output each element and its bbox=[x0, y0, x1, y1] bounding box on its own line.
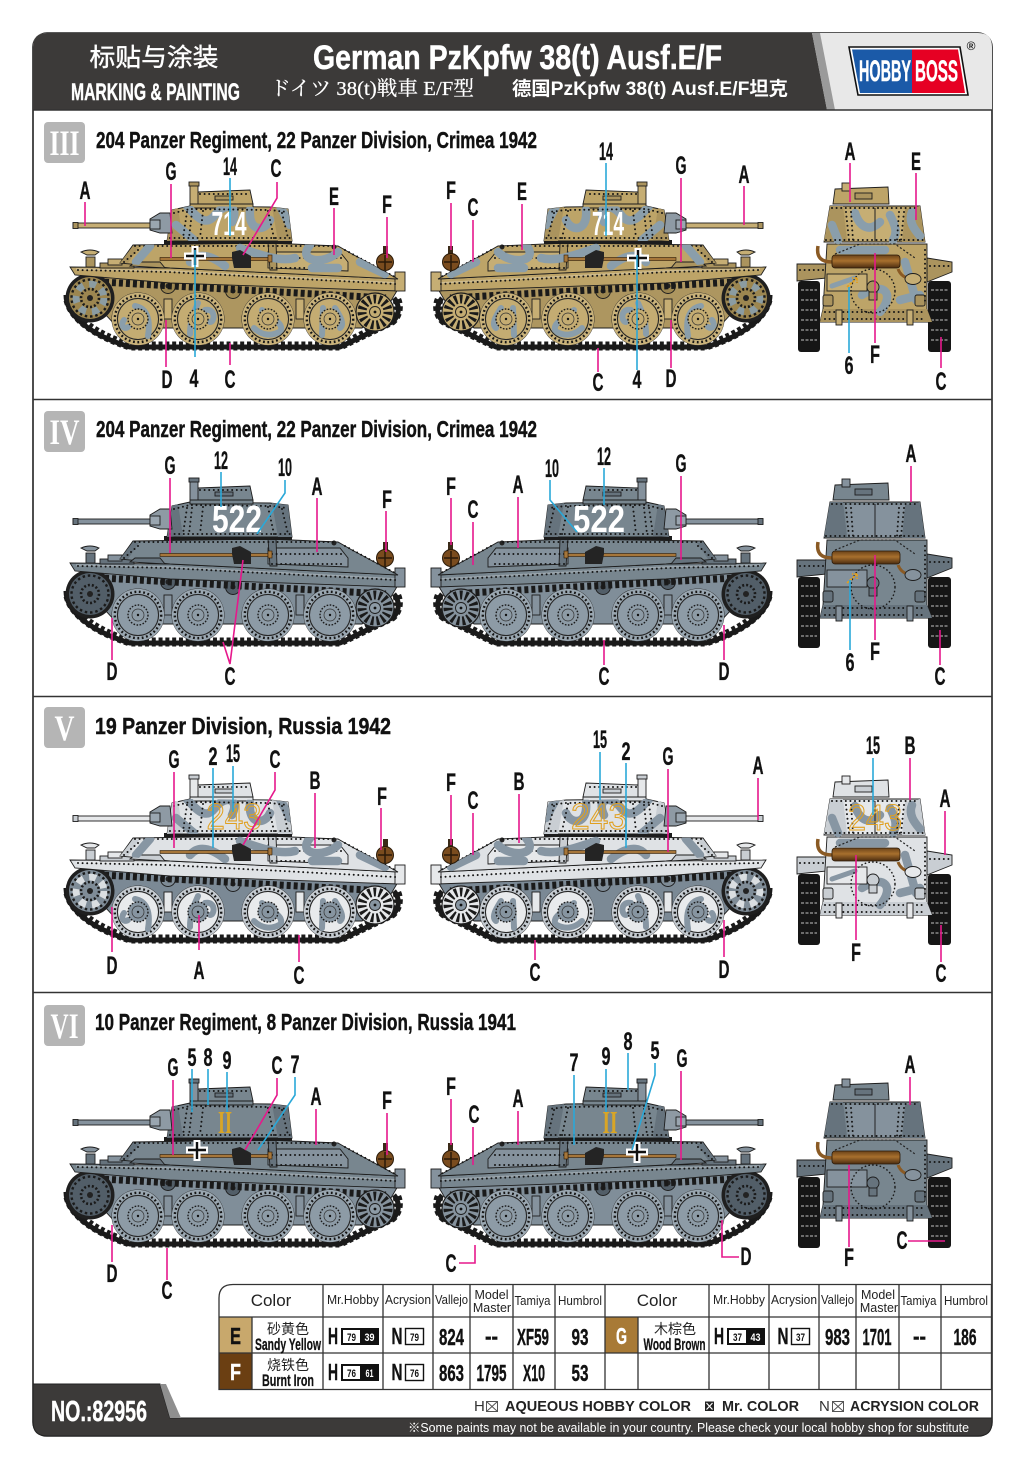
callout B: B bbox=[310, 767, 320, 795]
callout C bbox=[896, 1227, 945, 1255]
callout 12: 12 bbox=[597, 443, 611, 471]
Japanese title: ドイツ 38(t)戦車 E/F型 bbox=[270, 77, 474, 100]
callout G: G bbox=[164, 452, 176, 480]
logo: Hobby Boss: HOBBY bbox=[859, 55, 911, 88]
callout A bbox=[194, 915, 204, 985]
callout A: A bbox=[80, 177, 90, 205]
callout A bbox=[310, 1083, 322, 1145]
row: Sandy Yellow: 824 bbox=[439, 1324, 464, 1350]
row: Wood Brown: 1701 bbox=[862, 1324, 892, 1350]
callout 6 bbox=[846, 580, 854, 677]
badge: III: III bbox=[50, 123, 80, 163]
callout 4: 4 bbox=[190, 365, 199, 393]
logo: Hobby Boss: ® bbox=[967, 39, 976, 53]
callout 15 bbox=[866, 732, 880, 815]
callout G bbox=[676, 450, 686, 560]
callout 12: 12 bbox=[214, 447, 228, 475]
row: Sandy Yellow: 39 bbox=[364, 1332, 374, 1344]
badge: IV: IV bbox=[50, 412, 80, 452]
turret number: 522 bbox=[212, 499, 262, 541]
callout C: C bbox=[530, 959, 540, 987]
callout 5 bbox=[188, 1044, 197, 1112]
callout 6: 6 bbox=[844, 352, 854, 380]
callout C bbox=[162, 1248, 172, 1305]
callout G bbox=[676, 152, 686, 262]
swatch F bbox=[219, 1353, 252, 1389]
tank right side view bbox=[431, 1079, 770, 1244]
callout A: A bbox=[512, 1085, 524, 1113]
paint code legend: AQUEOUS HOBBY COLOR bbox=[505, 1398, 691, 1415]
callout G: G bbox=[676, 450, 686, 478]
callout 10: 10 bbox=[545, 455, 559, 483]
callout C: C bbox=[598, 663, 610, 691]
row: Sandy Yellow bbox=[255, 1319, 588, 1354]
row: Burnt Iron: X10 bbox=[523, 1360, 545, 1386]
tank right side view bbox=[431, 775, 770, 940]
callout C bbox=[468, 194, 478, 262]
callout 7 bbox=[258, 1051, 300, 1150]
heading: panel IV: 204 Panzer Regiment, 22 Panzer Division, Crimea 1942 bbox=[96, 416, 537, 442]
swatch E bbox=[219, 1317, 252, 1353]
table headers left: Mr.Hobby bbox=[327, 1293, 380, 1307]
header band bbox=[33, 33, 992, 110]
swatch E: E bbox=[230, 1323, 241, 1349]
heading: panel VI: 10 Panzer Regiment, 8 Panzer Division, Russia 1941 bbox=[95, 1009, 516, 1035]
tank left side view bbox=[66, 1079, 405, 1244]
callout 10 bbox=[257, 454, 292, 534]
callout A: A bbox=[844, 138, 856, 166]
turret number: 243 bbox=[848, 797, 902, 838]
badge: V: V bbox=[54, 708, 74, 748]
row: Sandy Yellow: H bbox=[328, 1323, 338, 1349]
callout G: G bbox=[676, 1045, 688, 1073]
callout F bbox=[851, 855, 861, 967]
callout 12 bbox=[597, 443, 611, 505]
callout 14 bbox=[223, 153, 237, 236]
callout G: G bbox=[676, 152, 686, 180]
callout F bbox=[446, 177, 456, 250]
callout B: B bbox=[514, 768, 524, 796]
callout 6 bbox=[844, 287, 854, 380]
callout 7: 7 bbox=[570, 1049, 578, 1077]
cross marking bbox=[184, 246, 206, 267]
callout D: D bbox=[718, 956, 730, 984]
callout C bbox=[468, 496, 478, 565]
callout F bbox=[446, 1073, 456, 1145]
row: Burnt Iron: 1795 bbox=[476, 1360, 507, 1386]
callout F: F bbox=[382, 1087, 392, 1115]
callout C bbox=[223, 560, 243, 691]
row: Wood Brown: 186 bbox=[954, 1324, 976, 1350]
callout G: G bbox=[662, 743, 674, 771]
badge: V bbox=[44, 707, 85, 748]
turret number: 714 bbox=[592, 205, 624, 242]
callout C bbox=[224, 343, 236, 394]
callout E bbox=[517, 178, 527, 250]
callout G bbox=[166, 158, 176, 258]
row: Wood Brown: N bbox=[778, 1323, 788, 1349]
table headers left: Acrysion bbox=[385, 1293, 431, 1307]
logo: Hobby Boss: BOSS bbox=[915, 55, 958, 88]
callout C bbox=[936, 337, 946, 396]
callout C: C bbox=[224, 663, 236, 691]
row: Wood Brown: 983 bbox=[825, 1324, 850, 1350]
panel: IV bbox=[44, 411, 952, 691]
callout F: F bbox=[446, 1073, 456, 1101]
callout A bbox=[904, 1051, 916, 1105]
paint code legend: Mr. COLOR bbox=[722, 1398, 799, 1415]
swatch G bbox=[605, 1317, 638, 1353]
callout C: C bbox=[468, 194, 478, 222]
callout C bbox=[530, 940, 540, 987]
callout F bbox=[382, 486, 392, 552]
callout F bbox=[382, 191, 392, 258]
callout F bbox=[844, 1165, 854, 1272]
callout 7: 7 bbox=[290, 1051, 300, 1079]
table headers right: Tamiya bbox=[900, 1294, 937, 1308]
row: Sandy Yellow: XF59 bbox=[517, 1324, 549, 1350]
callout F bbox=[446, 473, 456, 545]
callout F: F bbox=[446, 473, 456, 501]
row: Wood Brown: -- bbox=[913, 1323, 926, 1349]
tank rear view bbox=[797, 183, 952, 352]
callout C: C bbox=[468, 496, 478, 524]
swatch G: G bbox=[616, 1323, 627, 1349]
callout 8 bbox=[204, 1044, 213, 1105]
row: Sandy Yellow: 79 bbox=[410, 1332, 419, 1344]
row: Sandy Yellow: 砂黄色 bbox=[267, 1319, 309, 1339]
row: Wood Brown: 37 bbox=[796, 1332, 805, 1344]
callout 8: 8 bbox=[204, 1044, 213, 1072]
turret number: 714 bbox=[212, 205, 247, 242]
row: Burnt Iron: H bbox=[328, 1359, 338, 1385]
callout 4: 4 bbox=[632, 366, 642, 394]
callout 5: 5 bbox=[650, 1037, 660, 1065]
row: Sandy Yellow: 93 bbox=[572, 1324, 588, 1350]
table headers right bbox=[637, 1288, 988, 1315]
table headers left: Humbrol bbox=[558, 1294, 602, 1308]
callout A: A bbox=[738, 161, 750, 189]
callout C: C bbox=[934, 663, 946, 691]
callout F bbox=[446, 769, 456, 845]
callout C bbox=[468, 1101, 480, 1165]
callout G bbox=[662, 743, 674, 852]
cross marking bbox=[627, 248, 649, 269]
callout C bbox=[598, 640, 610, 691]
callout A: A bbox=[904, 1051, 916, 1079]
callout E bbox=[329, 183, 339, 255]
table headers right: Master bbox=[860, 1301, 898, 1315]
heading: marking and painting: MARKING & PAINTING bbox=[71, 79, 240, 106]
row: Sandy Yellow: 79 bbox=[347, 1332, 356, 1344]
callout D bbox=[106, 1225, 118, 1288]
row: Wood Brown bbox=[644, 1319, 976, 1354]
callout E: E bbox=[329, 183, 339, 211]
callout A bbox=[844, 138, 856, 202]
table headers right: Vallejo bbox=[821, 1293, 854, 1307]
row: Burnt Iron: 烧铁色 bbox=[267, 1355, 309, 1375]
callout 5: 5 bbox=[188, 1044, 197, 1072]
callout 14: 14 bbox=[223, 153, 237, 181]
callout A: A bbox=[310, 1083, 322, 1111]
callout F: F bbox=[844, 1244, 854, 1272]
callout 2 bbox=[208, 743, 218, 848]
swatch F: F bbox=[230, 1359, 241, 1385]
row: Wood Brown: 木棕色 bbox=[654, 1319, 696, 1339]
callout B bbox=[514, 768, 524, 843]
row: Burnt Iron: 76 bbox=[410, 1368, 419, 1380]
table headers left: Tamiya bbox=[514, 1294, 551, 1308]
main title: German PzKpfw 38(t) Ausf.E/F bbox=[313, 39, 722, 77]
tank left side view bbox=[66, 775, 405, 940]
callout D bbox=[106, 618, 118, 686]
callout D: D bbox=[106, 658, 118, 686]
row: Sandy Yellow: N bbox=[392, 1323, 402, 1349]
callout A bbox=[512, 471, 524, 548]
callout C bbox=[294, 935, 304, 990]
callout D: D bbox=[106, 1260, 118, 1288]
callout C: C bbox=[896, 1227, 908, 1255]
callout A bbox=[752, 752, 764, 820]
table headers left: Vallejo bbox=[435, 1293, 468, 1307]
callout 6: 6 bbox=[846, 649, 854, 677]
callout D bbox=[718, 920, 730, 984]
callout D: D bbox=[106, 952, 118, 980]
callout C bbox=[243, 746, 280, 845]
callout D: D bbox=[162, 366, 172, 394]
callout A: A bbox=[906, 440, 916, 468]
turret marking II: II bbox=[602, 1104, 618, 1140]
callout G bbox=[676, 1045, 688, 1160]
table headers left: Color bbox=[251, 1291, 292, 1310]
table headers right: Color bbox=[637, 1291, 678, 1310]
callout 14 bbox=[599, 138, 613, 236]
panel: VI bbox=[44, 1005, 952, 1305]
tank left side view bbox=[66, 478, 405, 643]
row: Burnt Iron: 863 bbox=[439, 1360, 464, 1386]
row: Burnt Iron: N bbox=[392, 1359, 402, 1385]
callout A bbox=[312, 473, 322, 552]
callout 10: 10 bbox=[278, 454, 292, 482]
callout F bbox=[870, 555, 880, 666]
callout D: D bbox=[666, 365, 676, 393]
callout B bbox=[310, 767, 320, 848]
panel: III bbox=[44, 122, 952, 397]
callout C: C bbox=[592, 369, 604, 397]
callout D bbox=[162, 320, 172, 394]
callout F: F bbox=[382, 486, 392, 514]
product number: NO.:82956 bbox=[51, 1396, 147, 1428]
panel: V bbox=[44, 707, 952, 990]
heading: panel V: 19 Panzer Division, Russia 1942 bbox=[95, 713, 391, 739]
turret marking II: II bbox=[218, 1104, 232, 1140]
row: Wood Brown: 37 bbox=[733, 1332, 742, 1344]
callout C: C bbox=[446, 1250, 456, 1278]
callout A bbox=[80, 177, 90, 226]
callout 7 bbox=[570, 1049, 578, 1145]
bottom bar bbox=[33, 1384, 992, 1436]
table headers right: Acrysion bbox=[771, 1293, 817, 1307]
callout C bbox=[245, 1052, 282, 1150]
paint colour table bbox=[219, 1284, 992, 1390]
callout 2 bbox=[622, 738, 630, 848]
table headers left: Master bbox=[473, 1301, 511, 1315]
row: Wood Brown: 43 bbox=[750, 1332, 760, 1344]
heading: panel III: 204 Panzer Regiment, 22 Panzer Division, Crimea 1942 bbox=[96, 127, 537, 153]
row: Wood Brown: Wood Brown bbox=[644, 1335, 706, 1354]
callout C bbox=[934, 630, 946, 691]
callout G: G bbox=[168, 746, 180, 774]
callout F: F bbox=[870, 638, 880, 666]
callout C: C bbox=[272, 1052, 282, 1080]
callout 9 bbox=[602, 1043, 610, 1112]
callout A: A bbox=[752, 752, 764, 780]
callout D: D bbox=[718, 658, 730, 686]
turret number: 243 bbox=[571, 796, 627, 837]
callout A bbox=[512, 1085, 524, 1145]
logo: Hobby Boss bbox=[849, 39, 976, 95]
callout C: C bbox=[270, 746, 280, 774]
tank rear view bbox=[797, 1079, 952, 1248]
callout G: G bbox=[166, 158, 176, 186]
callout 8: 8 bbox=[624, 1028, 633, 1056]
Chinese title: 德国PzKpfw 38(t) Ausf.E/F坦克 bbox=[512, 77, 788, 100]
callout C bbox=[446, 1245, 475, 1278]
callout F bbox=[870, 253, 880, 369]
callout C: C bbox=[294, 962, 304, 990]
callout 9: 9 bbox=[222, 1047, 232, 1075]
callout C: C bbox=[936, 960, 946, 988]
table headers left: Model bbox=[474, 1288, 509, 1302]
tank rear view bbox=[797, 776, 952, 945]
cross marking bbox=[186, 1140, 208, 1161]
callout 14: 14 bbox=[599, 138, 613, 166]
callout D bbox=[666, 320, 676, 393]
callout C bbox=[936, 925, 946, 988]
row: Burnt Iron: 61 bbox=[366, 1368, 374, 1380]
callout A: A bbox=[312, 473, 322, 501]
tank right side view bbox=[431, 478, 770, 643]
callout C: C bbox=[468, 1101, 480, 1129]
callout F: F bbox=[446, 769, 456, 797]
badge: VI: VI bbox=[50, 1006, 78, 1046]
callout F bbox=[377, 783, 387, 850]
callout 5 bbox=[632, 1037, 660, 1150]
callout 9 bbox=[222, 1047, 232, 1112]
callout 15: 15 bbox=[593, 726, 607, 754]
callout 8 bbox=[624, 1028, 633, 1090]
callout A: A bbox=[194, 957, 204, 985]
row: Sandy Yellow: Sandy Yellow bbox=[255, 1335, 321, 1354]
tank rear view bbox=[797, 479, 952, 648]
callout F: F bbox=[446, 177, 456, 205]
callout B bbox=[904, 732, 916, 800]
callout 9: 9 bbox=[602, 1043, 610, 1071]
callout F: F bbox=[851, 939, 861, 967]
callout 10 bbox=[545, 455, 577, 532]
row: Burnt Iron: 76 bbox=[347, 1368, 356, 1380]
callout G bbox=[168, 746, 180, 848]
table headers right: Model bbox=[861, 1288, 895, 1302]
callout A: A bbox=[512, 471, 524, 499]
row: Wood Brown: H bbox=[714, 1323, 724, 1349]
callout C: C bbox=[224, 366, 236, 394]
availability note: ※Some paints may not be available in your country. Please check your local hobby shop for substitute bbox=[408, 1421, 969, 1435]
callout C bbox=[592, 348, 604, 397]
callout 12 bbox=[214, 447, 228, 507]
row: Burnt Iron: 53 bbox=[572, 1360, 588, 1386]
callout C bbox=[468, 787, 478, 855]
callout 15: 15 bbox=[866, 732, 880, 760]
paint code legend: N bbox=[819, 1398, 830, 1415]
callout 2: 2 bbox=[622, 738, 630, 766]
callout A bbox=[738, 161, 750, 225]
callout D: D bbox=[740, 1243, 752, 1271]
row: Sandy Yellow: -- bbox=[485, 1323, 498, 1349]
tank right side view bbox=[431, 182, 770, 347]
paint code legend bbox=[474, 1398, 979, 1415]
callout G: G bbox=[168, 1054, 178, 1082]
callout D bbox=[722, 1220, 752, 1271]
callout A: A bbox=[940, 785, 950, 813]
paint code legend: ACRYSION COLOR bbox=[850, 1398, 979, 1415]
callout C bbox=[243, 155, 282, 255]
callout 15: 15 bbox=[226, 740, 240, 768]
table headers right: Mr.Hobby bbox=[713, 1293, 766, 1307]
row: Burnt Iron: Burnt Iron bbox=[262, 1371, 314, 1390]
callout D bbox=[106, 907, 118, 980]
turret number: 243 bbox=[206, 796, 262, 837]
callout 15 bbox=[226, 740, 240, 812]
callout C: C bbox=[162, 1277, 172, 1305]
callout 15 bbox=[593, 726, 607, 800]
callout E: E bbox=[911, 148, 921, 176]
callout 2: 2 bbox=[208, 743, 218, 771]
table headers right: Humbrol bbox=[944, 1294, 988, 1308]
heading: Chinese marking and painting: 标贴与涂装 bbox=[90, 38, 218, 74]
callout A bbox=[940, 785, 950, 855]
turret number: 522 bbox=[573, 499, 625, 541]
callout G bbox=[164, 452, 176, 553]
callout A bbox=[906, 440, 916, 502]
row: Burnt Iron bbox=[262, 1355, 588, 1390]
callout C: C bbox=[936, 368, 946, 396]
callout 4 bbox=[632, 255, 642, 394]
callout C: C bbox=[270, 155, 282, 183]
callout F: F bbox=[382, 191, 392, 219]
callout E bbox=[911, 148, 921, 220]
callout D bbox=[718, 625, 730, 686]
callout G bbox=[168, 1054, 178, 1155]
callout E: E bbox=[517, 178, 527, 206]
panel dividers bbox=[33, 400, 992, 992]
paint code legend: H bbox=[474, 1398, 485, 1415]
cross marking bbox=[626, 1142, 648, 1163]
callout F: F bbox=[870, 341, 880, 369]
callout C: C bbox=[468, 787, 478, 815]
callout F: F bbox=[377, 783, 387, 811]
table headers left bbox=[251, 1288, 602, 1315]
callout B: B bbox=[904, 732, 916, 760]
callout F bbox=[382, 1087, 392, 1155]
tank left side view bbox=[66, 182, 405, 347]
